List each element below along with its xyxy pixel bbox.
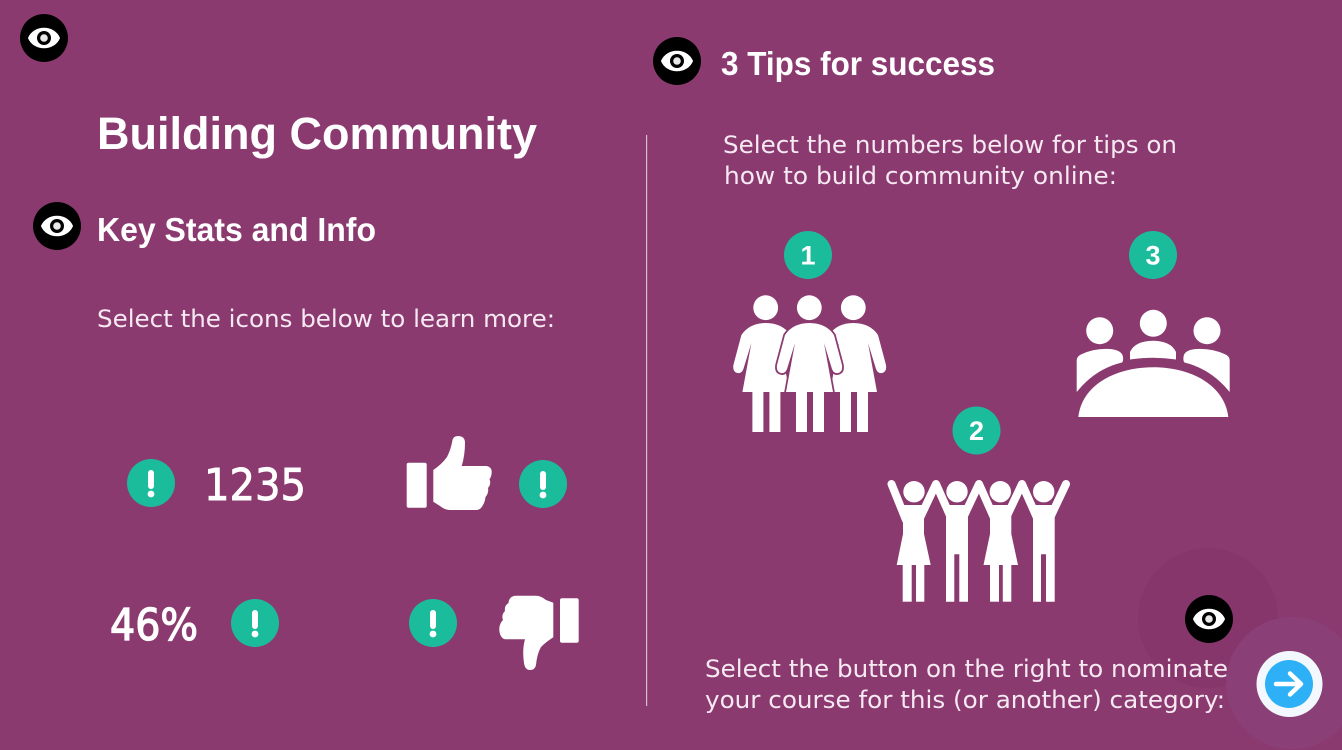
number badge 1	[784, 231, 832, 279]
icon: three women	[733, 295, 886, 432]
alert badge 46%	[231, 599, 279, 647]
number badge 2: 2	[969, 416, 984, 446]
icon: thumbs down	[499, 596, 579, 670]
title: Building Community	[97, 108, 537, 159]
text: select icons instruction: Select the icons below to learn more:	[97, 305, 555, 333]
decorative dark circle behind eye	[1138, 548, 1278, 688]
icon: thumbs up	[407, 436, 492, 510]
text: tips instruction	[723, 131, 1177, 190]
alert badge 1235	[127, 459, 175, 507]
icon: eye key stats	[33, 202, 81, 250]
icon: people around table	[1077, 310, 1230, 417]
button: next arrow	[1256, 651, 1322, 717]
decorative light circle behind button	[1226, 617, 1342, 749]
text: nominate instruction	[705, 655, 1228, 714]
number badge 1: 1	[800, 240, 816, 270]
number badge 2	[952, 406, 1000, 454]
text: nominate instruction: Select the button on the right to nominate	[705, 655, 1228, 683]
text: tips instruction: how to build community online:	[724, 162, 1117, 190]
divider line	[646, 135, 647, 706]
number badge 3	[1129, 231, 1177, 279]
number badge 3: 3	[1145, 240, 1161, 270]
alert badge thumbs up	[519, 460, 567, 508]
heading: tips: 3 Tips for success	[721, 45, 995, 82]
icon: eye tips heading	[653, 37, 701, 85]
heading: key stats: Key Stats and Info	[97, 211, 376, 248]
icon: four people arms raised	[892, 481, 1066, 602]
text: nominate instruction: your course for this (or another) category:	[705, 686, 1225, 714]
icon: eye top left	[20, 14, 68, 62]
stat: 46%: 46%	[110, 600, 198, 651]
stat: 1235: 1235	[204, 460, 306, 511]
icon: eye nomination	[1185, 595, 1233, 643]
text: tips instruction: Select the numbers below for tips on	[723, 131, 1177, 159]
alert badge thumbs down	[409, 599, 457, 647]
